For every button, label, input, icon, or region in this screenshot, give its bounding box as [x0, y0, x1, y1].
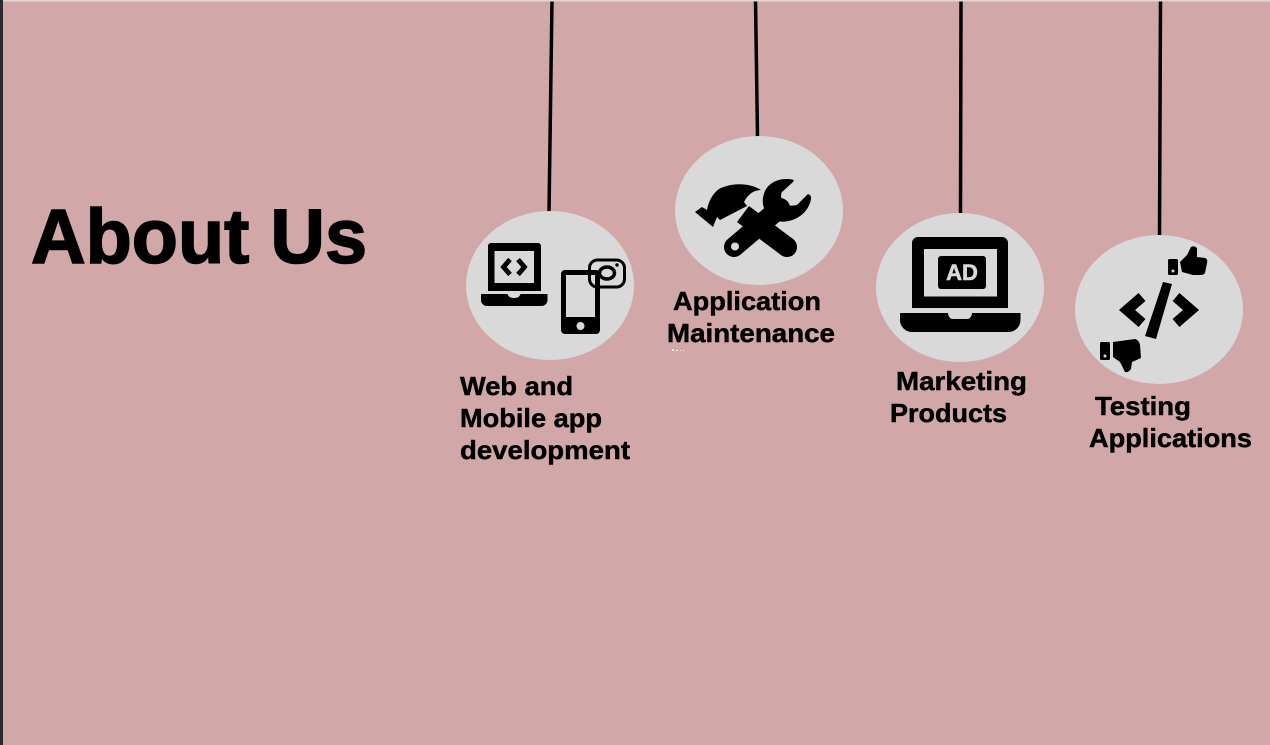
circle: [1075, 235, 1243, 384]
label: Products: [890, 398, 1007, 428]
icon: laptop with ad: [900, 237, 1020, 332]
label: Application: [673, 286, 821, 316]
label: Web and: [460, 371, 573, 401]
icon: hammer and wrench: [695, 179, 811, 257]
label: [667, 286, 835, 348]
icon: code brackets: [1127, 282, 1191, 339]
label: [1089, 391, 1252, 453]
label: Applications: [1089, 423, 1252, 453]
icon: laptop with ad: AD: [946, 260, 978, 285]
icon: thumbs up: [1168, 246, 1207, 275]
circle: [675, 136, 843, 285]
hanging line: [959, 0, 963, 214]
panel: web and mobile app development: [460, 0, 634, 465]
panel: marketing products: [876, 0, 1044, 428]
panel: application maintenance: [667, 0, 843, 351]
circle: [466, 211, 634, 360]
icon: code laptop: [481, 243, 548, 306]
label: Marketing: [896, 366, 1027, 396]
label: [890, 366, 1027, 428]
hanging line: [756, 0, 758, 137]
label: [460, 371, 630, 465]
label: development: [460, 435, 630, 465]
hanging line: [1160, 0, 1161, 236]
panel: testing applications: [1075, 0, 1252, 453]
icon: instagram: [590, 260, 624, 287]
label: Mobile app: [460, 403, 602, 433]
title: About Us: [31, 194, 367, 280]
hanging line: [549, 0, 552, 212]
icon: thumbs down: [1100, 339, 1141, 372]
circle: [876, 213, 1044, 362]
label: Maintenance: [667, 318, 835, 348]
icon: smartphone: [561, 270, 600, 334]
label: Testing: [1095, 391, 1191, 421]
